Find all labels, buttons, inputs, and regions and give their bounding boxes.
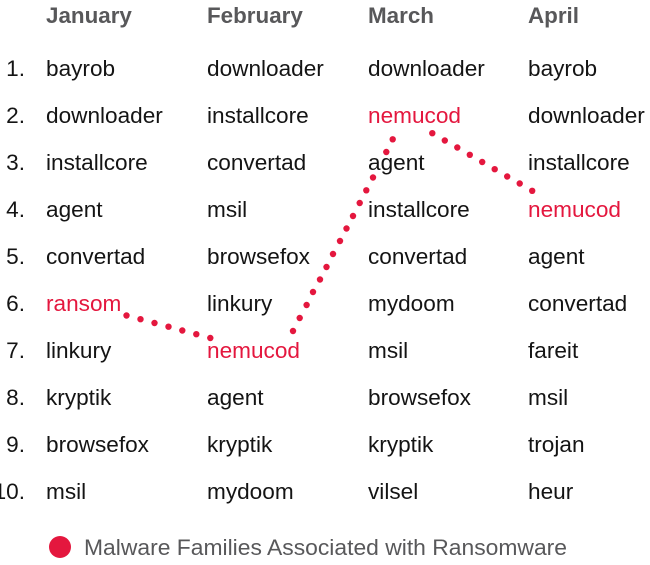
column: April: heur: [528, 479, 574, 504]
column: April: bayrob: [528, 56, 597, 81]
column: January: downloader: [46, 103, 163, 128]
column: March: browsefox: [368, 385, 472, 410]
rank numbers: 2.: [6, 103, 25, 128]
legend: Malware Families Associated with Ransomware: [84, 535, 567, 560]
column: March: installcore: [368, 197, 470, 222]
rank numbers: [0, 56, 25, 504]
column: January: kryptik: [46, 385, 112, 410]
column: April: convertad: [528, 291, 627, 316]
column: April: installcore: [528, 150, 630, 175]
rank numbers: 9.: [6, 432, 25, 457]
column: January: ransom: [46, 291, 121, 316]
rank numbers: 8.: [6, 385, 25, 410]
column: January: bayrob: [46, 56, 115, 81]
column: April: trojan: [528, 432, 585, 457]
dotted line: nemucod rank trend: [123, 130, 535, 341]
column: January: installcore: [46, 150, 148, 175]
column: April: [528, 56, 645, 504]
column: February: kryptik: [207, 432, 273, 457]
column headings: February: [207, 3, 303, 28]
column: February: browsefox: [207, 244, 311, 269]
column headings: April: [528, 3, 579, 28]
column: April: nemucod: [528, 197, 621, 222]
column: February: downloader: [207, 56, 324, 81]
column: February: [207, 56, 324, 504]
column: February: mydoom: [207, 479, 294, 504]
column: April: msil: [528, 385, 568, 410]
rank numbers: 3.: [6, 150, 25, 175]
column: January: agent: [46, 197, 103, 222]
rank numbers: 4.: [6, 197, 25, 222]
column: January: msil: [46, 479, 86, 504]
rank numbers: 6.: [6, 291, 25, 316]
column: January: browsefox: [46, 432, 150, 457]
column: April: fareit: [528, 338, 579, 363]
column: January: [46, 56, 163, 504]
column: March: kryptik: [368, 432, 434, 457]
column: March: msil: [368, 338, 408, 363]
column: April: downloader: [528, 103, 645, 128]
column: March: convertad: [368, 244, 467, 269]
column: March: agent: [368, 150, 425, 175]
column: March: vilsel: [368, 479, 418, 504]
column: March: nemucod: [368, 103, 461, 128]
column: March: [368, 56, 485, 504]
column headings: March: [368, 3, 434, 28]
column: February: installcore: [207, 103, 309, 128]
column: January: linkury: [46, 338, 112, 363]
column: March: mydoom: [368, 291, 455, 316]
column: April: agent: [528, 244, 585, 269]
column: February: linkury: [207, 291, 273, 316]
rank numbers: 5.: [6, 244, 25, 269]
column: January: convertad: [46, 244, 145, 269]
column: February: nemucod: [207, 338, 300, 363]
column: February: convertad: [207, 150, 306, 175]
column headings: January: [46, 3, 132, 28]
column headings: [46, 3, 579, 28]
rank numbers: 7.: [6, 338, 25, 363]
column: February: msil: [207, 197, 247, 222]
column: March: downloader: [368, 56, 485, 81]
column: February: agent: [207, 385, 264, 410]
rank numbers: 1.: [6, 56, 25, 81]
